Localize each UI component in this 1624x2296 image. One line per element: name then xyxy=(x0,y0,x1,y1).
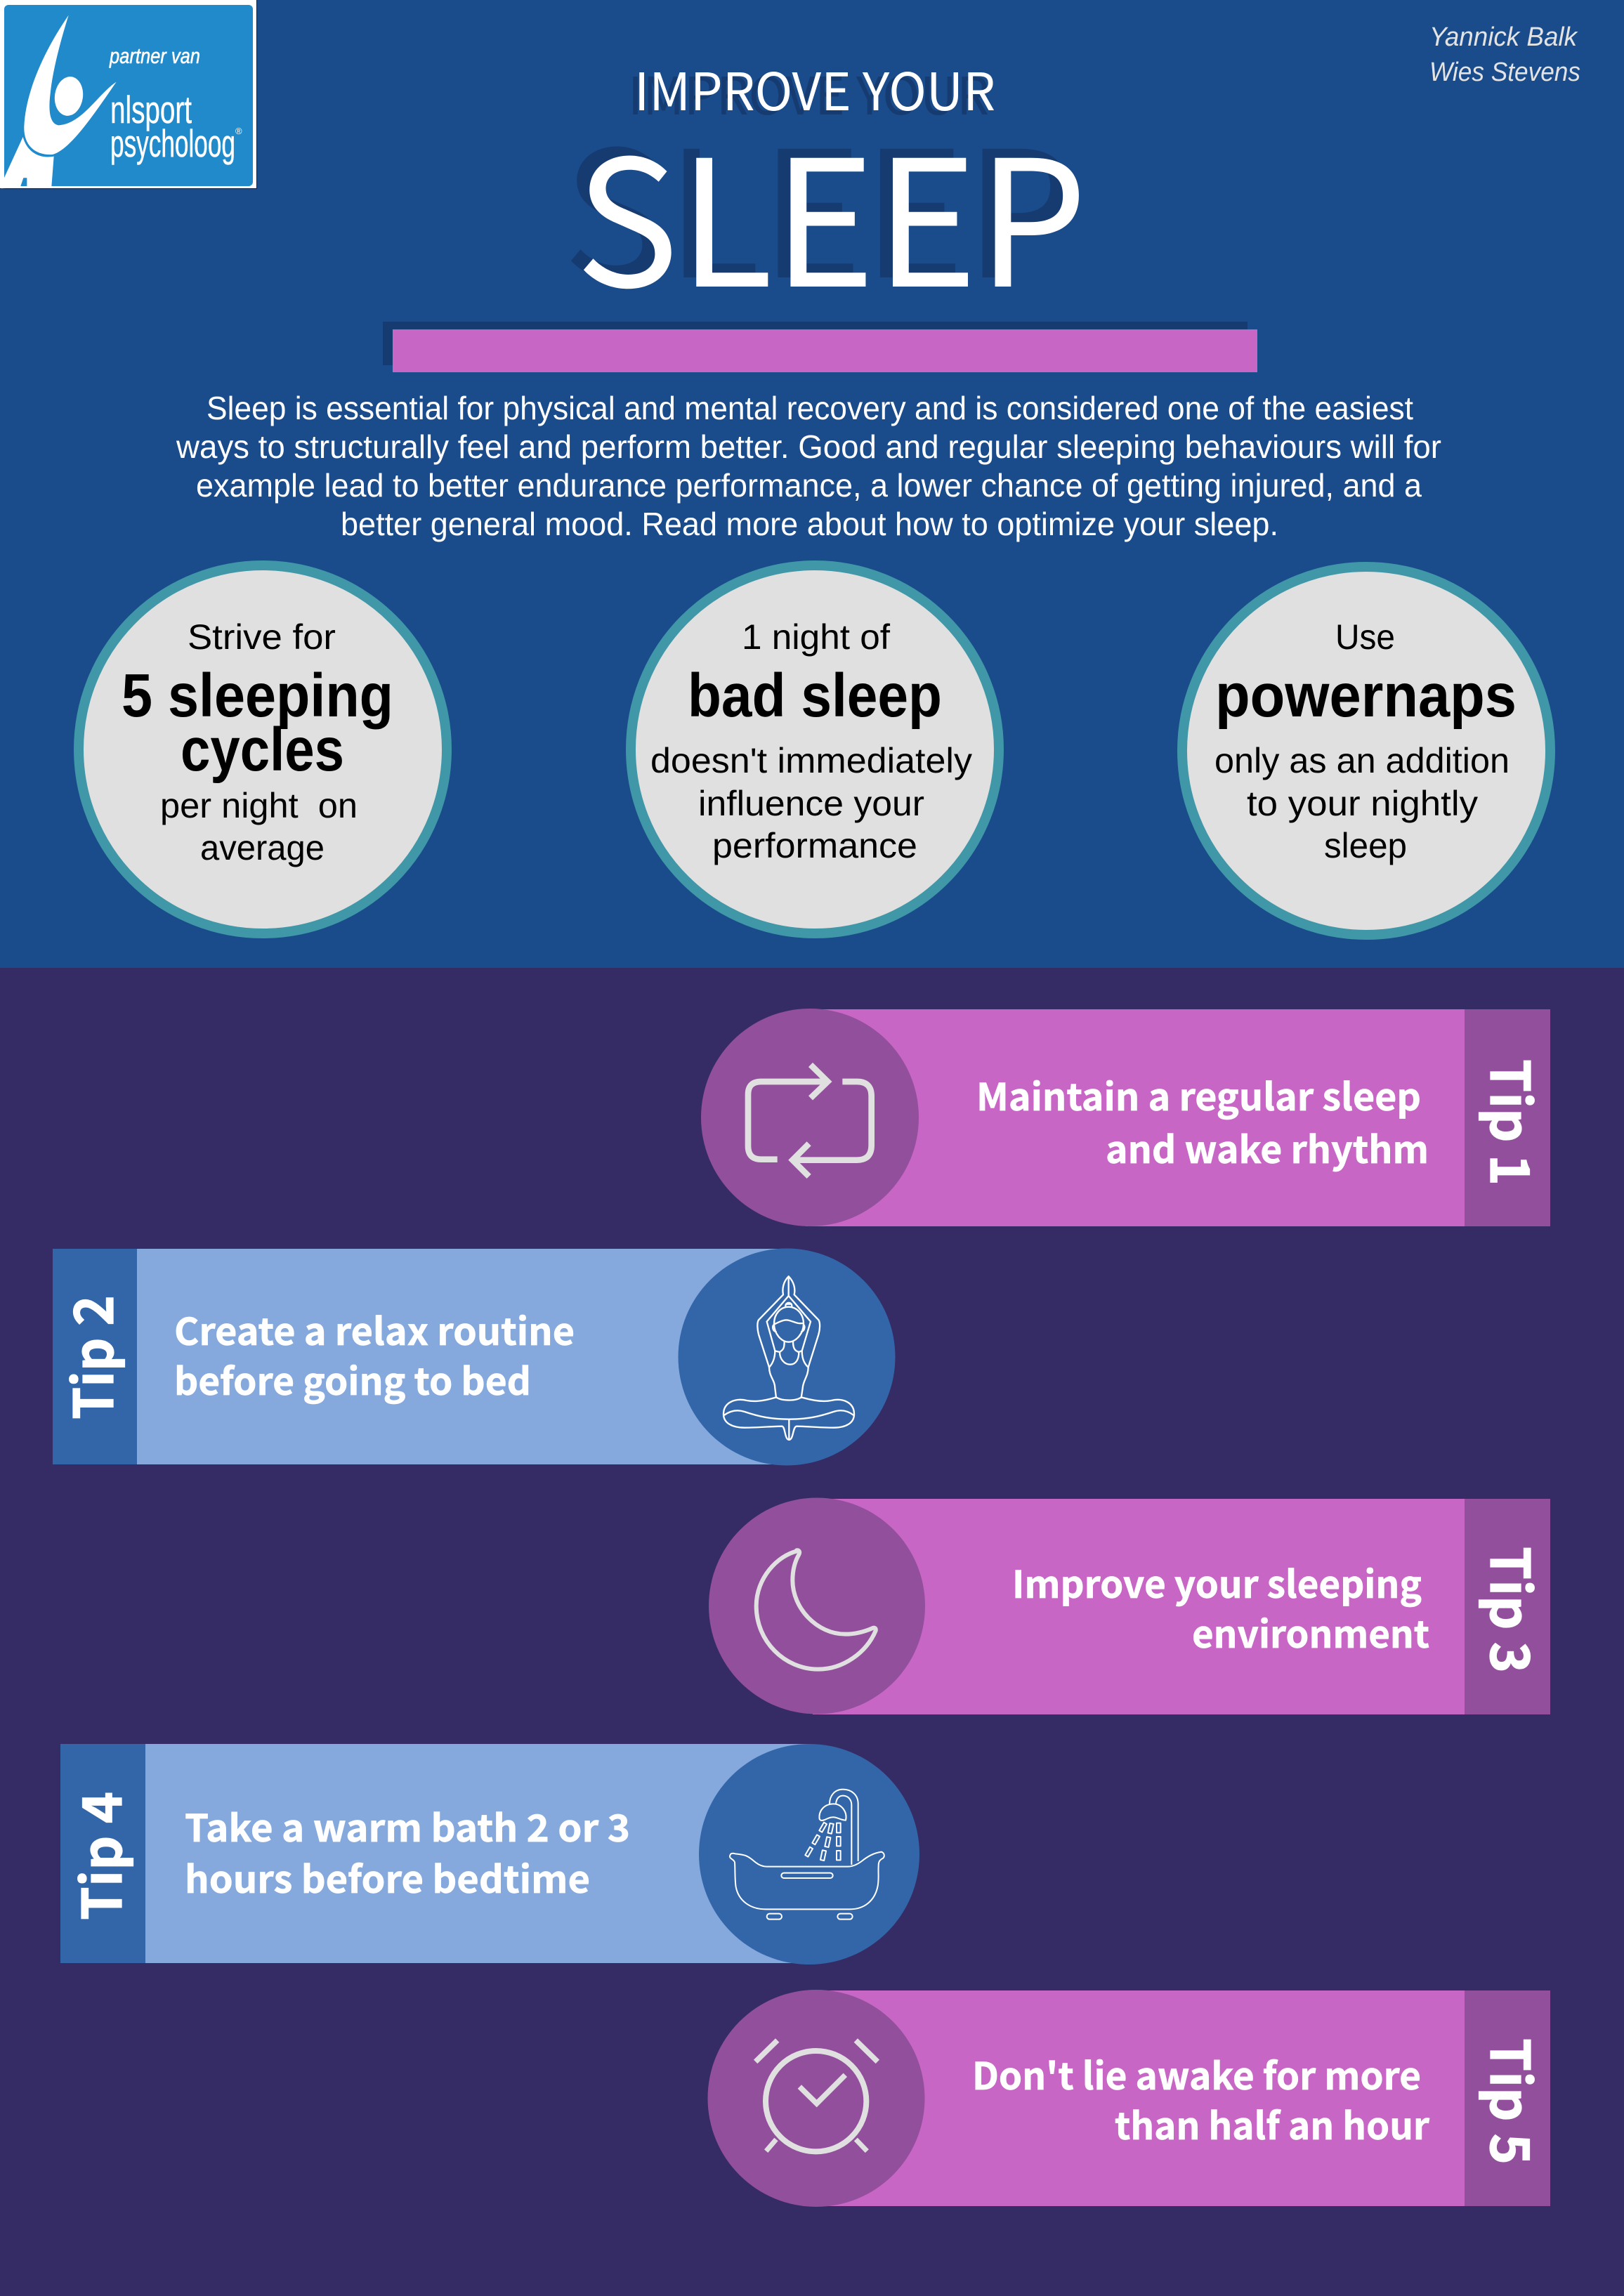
icon: repeat arrows xyxy=(748,1065,872,1176)
tip 2 text: Create a relax routine xyxy=(174,1303,575,1356)
panel: fact circle 3: Use xyxy=(1335,617,1395,657)
panel: fact circle 3: powernaps xyxy=(1215,662,1517,730)
panel: fact circle 1 xyxy=(79,565,447,933)
panel: fact circle 2: performance xyxy=(712,826,917,865)
tip 1 text: Maintain a regular sleep xyxy=(976,1068,1421,1122)
panel: tip 3 xyxy=(709,1497,1552,1714)
panel: fact circle 1: average xyxy=(200,828,325,867)
panel: fact circle 1: Strive for xyxy=(188,617,336,657)
panel: fact circle 2: doesn't immediately xyxy=(650,741,972,780)
intro text: example lead to better endurance performance, a lower chance of getting injured, and a xyxy=(196,467,1422,504)
icon: moon xyxy=(757,1550,876,1669)
tip 2 label: Tip 2 xyxy=(51,1295,129,1419)
title: IMPROVE YOUR xyxy=(628,55,989,130)
tip 3 text: environment xyxy=(1192,1606,1429,1659)
background: top section xyxy=(0,0,1624,968)
tip 1 label: Tip 1 xyxy=(1474,1059,1552,1186)
logo: nlsportpsycholoog: partner van xyxy=(109,44,200,68)
icon: bathtub with shower xyxy=(730,1790,884,1920)
panel: fact circle 1: cycles xyxy=(181,716,344,784)
tip 2 text xyxy=(174,1303,575,1406)
logo: nlsportpsycholoog: psycholoog xyxy=(110,122,235,165)
tip 5 text: Don't lie awake for more xyxy=(972,2047,1421,2101)
panel: fact circle 2: bad sleep xyxy=(688,662,942,730)
title: SLEEP xyxy=(575,83,1087,337)
tip 5 label: Tip 5 xyxy=(1474,2038,1552,2165)
tip 2 text: before going to bed xyxy=(174,1353,531,1406)
panel: fact circle 3: to your nightly xyxy=(1247,784,1478,823)
tip 4 text xyxy=(185,1799,630,1904)
tip 1 text: and wake rhythm xyxy=(1106,1121,1429,1174)
panel: tip 2 xyxy=(51,1249,895,1465)
intro text: ways to structurally feel and perform better. Good and regular sleeping behaviours will for xyxy=(176,428,1441,465)
tip 4 text: hours before bedtime xyxy=(185,1851,590,1904)
tip 5 text xyxy=(972,2047,1430,2151)
panel: fact circle 2: influence your xyxy=(698,784,924,823)
panel: fact circle 2 xyxy=(631,565,999,933)
intro text: better general mood. Read more about how to optimize your sleep. xyxy=(341,506,1278,542)
panel: tip 4 xyxy=(60,1744,919,1964)
logo: nlsportpsycholoog xyxy=(0,0,257,189)
intro text: Sleep is essential for physical and mental recovery and is considered one of the easiest xyxy=(207,390,1413,426)
logo: nlsportpsycholoog: nlsport xyxy=(110,88,192,131)
panel: fact circle 3: only as an addition xyxy=(1214,741,1510,780)
intro text xyxy=(176,390,1441,542)
background: bottom section xyxy=(0,968,1624,2296)
icon: yoga figure xyxy=(723,1276,854,1440)
tip 4 label: Tip 4 xyxy=(60,1792,138,1920)
tip 4 text: Take a warm bath 2 or 3 xyxy=(185,1799,630,1853)
panel: fact circle 3: sleep xyxy=(1324,826,1407,865)
tip 1 text xyxy=(976,1068,1429,1174)
panel: tip 1 xyxy=(701,1009,1552,1226)
panel: tip 5 xyxy=(708,1990,1552,2207)
authors: Wies Stevens xyxy=(1429,58,1580,87)
tip 3 text: Improve your sleeping xyxy=(1012,1556,1422,1609)
panel: fact circle 2: 1 night of xyxy=(742,617,890,657)
authors xyxy=(1429,22,1580,87)
title accent bar xyxy=(383,322,1257,372)
logo: nlsportpsycholoog: ® xyxy=(235,126,242,136)
icon: alarm clock xyxy=(756,2040,877,2151)
panel: fact circle 1: 5 sleeping xyxy=(122,662,393,730)
tip 5 text: than half an hour xyxy=(1115,2097,1430,2151)
title: IMPROVE YOUR xyxy=(634,51,995,126)
title: SLEEP xyxy=(563,74,1075,328)
tip 3 label: Tip 3 xyxy=(1474,1547,1552,1673)
tip 3 text xyxy=(1012,1556,1429,1659)
authors: Yannick Balk xyxy=(1429,22,1578,52)
panel: fact circle 1: per night on xyxy=(160,786,358,825)
panel: fact circle 3 xyxy=(1182,567,1550,935)
